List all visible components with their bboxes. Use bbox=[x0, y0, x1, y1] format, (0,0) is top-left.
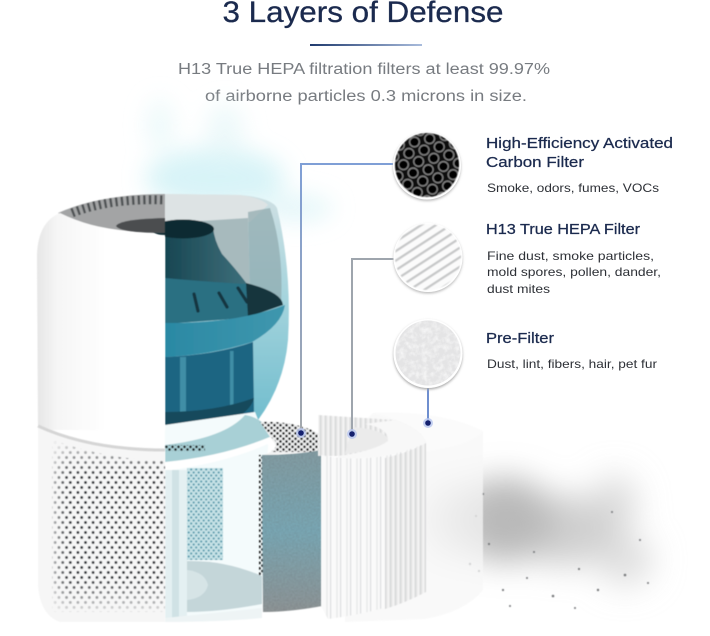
front pleats bbox=[321, 443, 426, 619]
band bbox=[165, 305, 285, 357]
swatch: carbon honeycomb bbox=[393, 132, 461, 201]
inner base bbox=[187, 561, 262, 612]
upper body bbox=[37, 213, 165, 430]
inner perforated panel bbox=[187, 468, 223, 560]
lower housing bbox=[165, 412, 268, 620]
control panel bbox=[116, 218, 165, 233]
subtitle: H13 True HEPA filtration filters at least 99.97% bbox=[178, 61, 550, 78]
connector: HEPA bbox=[347, 259, 395, 439]
label: HEPA filter bbox=[486, 222, 661, 296]
label: carbon filter: Carbon Filter bbox=[486, 155, 584, 171]
label: HEPA filter: Fine dust, smoke particles, bbox=[487, 249, 654, 263]
label: HEPA filter: dust mites bbox=[487, 282, 550, 296]
smoke particles bbox=[469, 493, 649, 609]
inner shell shadow bbox=[248, 208, 282, 305]
label: HEPA filter: mold spores, pollen, dander, bbox=[487, 265, 661, 279]
back pleats bbox=[318, 415, 426, 456]
label: pre-filter: Dust, lint, fibers, hair, pet fur bbox=[487, 357, 657, 371]
title divider bbox=[310, 44, 422, 46]
pre-filter cylinder bbox=[345, 413, 483, 622]
purifier: cutaway interior bbox=[152, 194, 289, 622]
swatch: pre-filter fibre bbox=[394, 319, 462, 390]
slotted collar bbox=[165, 278, 262, 324]
label: pre-filter: Pre-Filter bbox=[486, 331, 554, 347]
perforated edge bbox=[259, 455, 263, 575]
top funnel bbox=[165, 225, 247, 324]
disc bbox=[246, 283, 283, 317]
inner white tube bbox=[165, 470, 187, 618]
lower body bbox=[38, 425, 165, 622]
label: pre-filter bbox=[486, 331, 657, 371]
label: carbon filter bbox=[486, 136, 673, 195]
connector: pre-filter bbox=[423, 386, 433, 428]
air plume bbox=[145, 99, 333, 221]
vent fins bbox=[72, 200, 165, 213]
label: carbon filter: Smoke, odors, fumes, VOCs bbox=[487, 181, 659, 195]
body seam bbox=[38, 426, 165, 450]
top rim bbox=[165, 194, 268, 222]
label: HEPA filter: H13 True HEPA Filter bbox=[486, 222, 640, 238]
lower fan bbox=[165, 342, 254, 440]
shell bbox=[165, 194, 289, 425]
subtitle bbox=[178, 61, 550, 105]
filter seat ring bbox=[165, 415, 272, 466]
carbon sheet bbox=[262, 450, 322, 612]
purifier: white body left half bbox=[37, 194, 165, 622]
grille perforation bbox=[46, 440, 165, 615]
connector: carbon bbox=[296, 164, 395, 438]
smoke cloud bbox=[421, 475, 653, 609]
subtitle: of airborne particles 0.3 microns in size. bbox=[205, 88, 527, 105]
HEPA filter bbox=[318, 415, 426, 619]
top vent bbox=[58, 194, 165, 233]
swatch: HEPA stripes bbox=[394, 223, 462, 294]
label: carbon filter: High-Efficiency Activated bbox=[486, 136, 673, 152]
perforated top bbox=[260, 422, 331, 455]
carbon filter bbox=[259, 422, 331, 612]
